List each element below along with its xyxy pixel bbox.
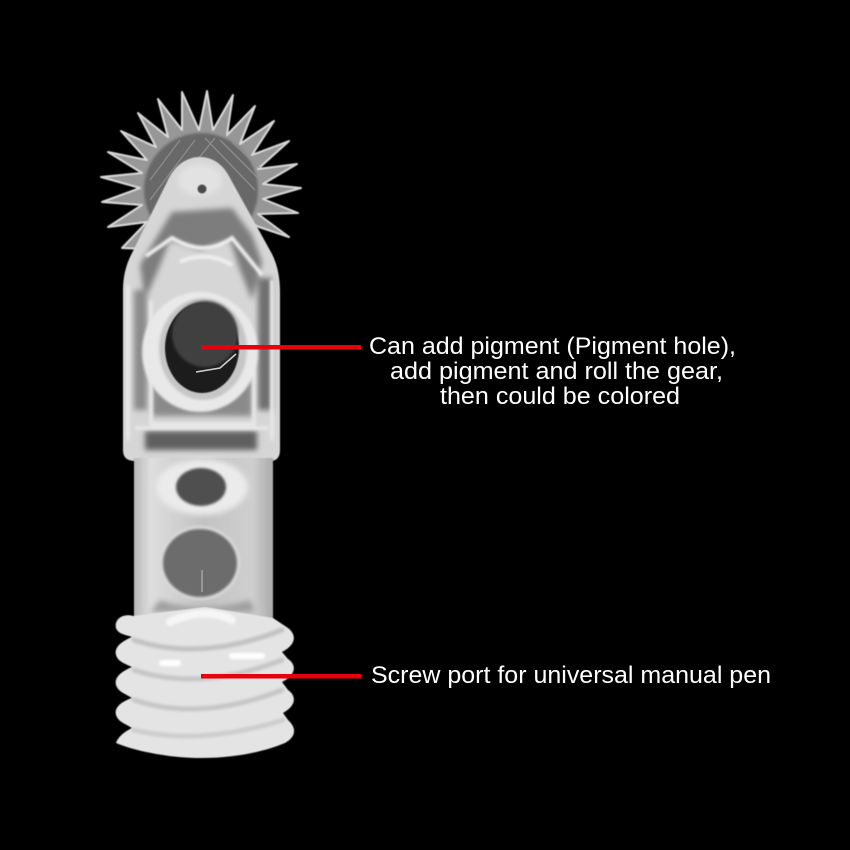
bright arch ridge — [146, 238, 262, 275]
product illustration: gear roller head — [101, 91, 301, 758]
callout: pigment hole — [201, 333, 736, 410]
text block: pigment hole description: add pigment and roll the gear, — [390, 358, 723, 385]
icon: lower neck hole — [163, 529, 237, 597]
text block: pigment hole description: Can add pigment (Pigment hole), — [369, 333, 736, 360]
callout: screw port — [201, 662, 771, 689]
arrow: screw port leader line — [201, 674, 361, 678]
frame ridges — [128, 280, 272, 440]
cap highlights — [178, 164, 222, 196]
neck hole ring — [156, 459, 248, 515]
housing shadow panels — [134, 208, 272, 450]
thread shading and highlights — [134, 613, 283, 736]
neck hole outline — [160, 526, 240, 600]
cap pinhole — [198, 184, 206, 194]
panel: threaded screw port — [116, 607, 294, 758]
icon: toothed gear wheel — [101, 91, 301, 250]
arrow: pigment hole leader line — [201, 345, 361, 350]
panel: transparent upper housing — [123, 157, 280, 461]
neck lower shading — [150, 600, 255, 612]
icon: upper neck hole — [176, 468, 226, 506]
text block: pigment hole description: then could be colored — [440, 383, 680, 410]
pigment hole ring — [142, 292, 258, 412]
gear brushed lines — [150, 138, 260, 212]
icon: pigment hole — [165, 301, 239, 393]
panel: neck with viewing holes — [134, 458, 273, 623]
gear disc — [144, 133, 258, 247]
text block: pigment hole description — [369, 333, 736, 410]
text block: screw port description: Screw port for universal manual pen — [371, 662, 771, 689]
